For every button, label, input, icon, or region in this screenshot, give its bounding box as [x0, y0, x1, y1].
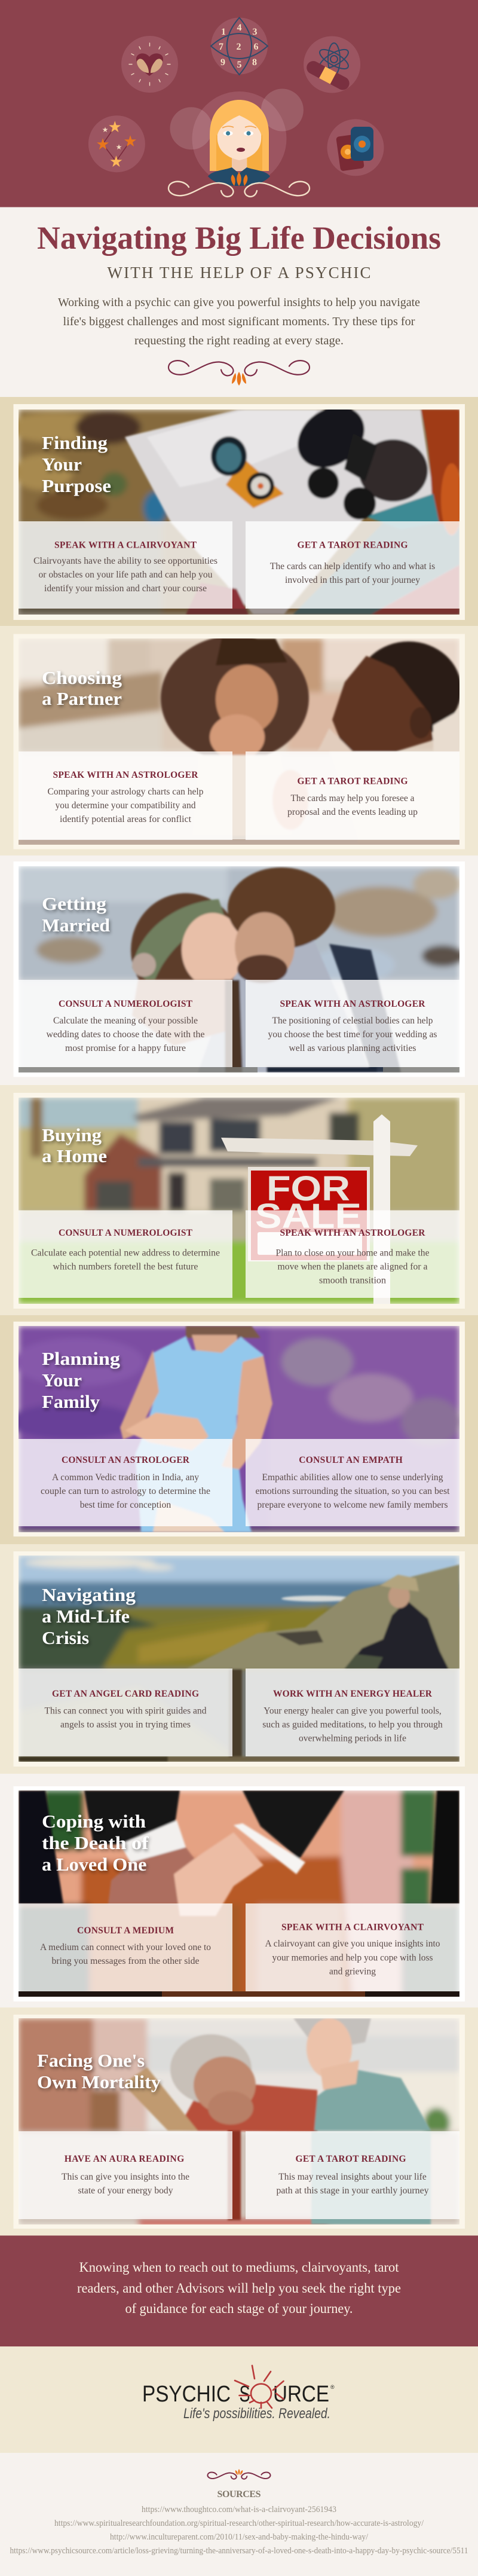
heading — [37, 2050, 161, 2092]
card: astrologer: SPEAK WITH AN ASTROLOGER — [280, 999, 425, 1009]
closing banner: of guidance for each stage of your journey. — [125, 2301, 353, 2316]
panel: Facing One's Own Mortality — [0, 2007, 478, 2236]
card: tarot — [246, 521, 459, 609]
icon: numerology grid: 9 — [220, 57, 225, 68]
heading: Your — [42, 1370, 82, 1391]
sources — [10, 2469, 468, 2556]
intro text: requesting the right reading at every stage. — [134, 334, 344, 347]
subtitle: WITH THE HELP OF A PSYCHIC — [108, 264, 370, 282]
intro text — [58, 296, 420, 347]
heading: Finding — [42, 432, 108, 453]
heading — [42, 1584, 136, 1648]
photo: holding hands at a funeral — [19, 1790, 459, 1997]
card: numerologist: CONSULT A NUMEROLOGIST — [59, 1228, 193, 1238]
photo: house with for-sale sign — [19, 1098, 459, 1304]
heading: Family — [42, 1391, 100, 1412]
heading: Planning — [42, 1348, 121, 1369]
card: astrologer: best time for conception — [80, 1500, 171, 1510]
heading: Married — [42, 915, 110, 936]
card: numerologist: which numbers foretell the best future — [53, 1261, 198, 1272]
logo: Psychic Source: S — [239, 2382, 250, 2407]
card: numerologist: Calculate each potential new address to determine — [31, 1248, 220, 1258]
icon: constellation: ★ — [123, 133, 137, 151]
card: tarot: GET A TAROT READING — [298, 777, 407, 787]
card: numerologist: Calculate the meaning of your possible — [53, 1016, 198, 1026]
card: tarot: path at this stage in your earthly journey — [276, 2186, 429, 2196]
heading — [42, 893, 110, 936]
photo: map, compass and binoculars — [19, 410, 459, 615]
card: clairvoyant: Clairvoyants have the ability to see opportunities — [33, 556, 217, 566]
card: angel cards: GET AN ANGEL CARD READING — [52, 1689, 199, 1699]
card: numerologist — [19, 980, 232, 1067]
card: astrologer: you determine your compatibility and — [55, 800, 196, 811]
icon: numerology grid: 8 — [252, 57, 257, 68]
card: angel cards — [19, 1669, 232, 1756]
sources list — [10, 2505, 468, 2556]
photo: senior couple in kitchen — [19, 2018, 459, 2225]
card: tarot: The cards may help you foresee a — [290, 793, 415, 803]
card: aura: HAVE AN AURA READING — [65, 2154, 184, 2164]
closing banner: Knowing when to reach out to mediums, clairvoyants, tarot — [79, 2260, 399, 2275]
card: clairvoyant: A clairvoyant can give you unique insights into — [265, 1939, 440, 1949]
card: astrologer: CONSULT AN ASTROLOGER — [62, 1455, 190, 1465]
card: astrologer: SPEAK WITH AN ASTROLOGER — [280, 1228, 425, 1238]
card: angel cards: This can connect you with spirit guides and — [44, 1706, 207, 1716]
icon: constellation: ★ — [116, 143, 122, 151]
card: astrologer: move when the planets are aligned for a — [277, 1261, 428, 1272]
card: numerologist: CONSULT A NUMEROLOGIST — [59, 999, 193, 1009]
sources list: http://www.incultureparent.com/2010/11/sex-and-baby-making-the-hindu-way/ — [110, 2532, 369, 2542]
ornament: cream flourish — [168, 182, 310, 197]
card: astrologer: smooth transition — [319, 1276, 386, 1286]
card: clairvoyant: your memories and help you cope with loss — [272, 1952, 433, 1963]
icon: numerology grid: 3 — [252, 27, 257, 37]
card: empath: CONSULT AN EMPATH — [299, 1455, 403, 1465]
card: astrologer: A common Vedic tradition in India, any — [52, 1472, 199, 1483]
icon: atom and bandage — [304, 36, 360, 93]
icon: healing hands heart — [121, 36, 178, 93]
card: aura: state of your energy body — [78, 2186, 173, 2196]
card: aura — [19, 2131, 232, 2219]
card: astrologer: The positioning of celestial bodies can help — [272, 1016, 433, 1026]
sources list: https://www.thoughtco.com/what-is-a-clairvoyant-2561943 — [142, 2505, 336, 2514]
card: energy healer: such as guided meditations, to help you through — [262, 1720, 443, 1730]
card: clairvoyant: SPEAK WITH A CLAIRVOYANT — [54, 540, 197, 550]
card: astrologer: couple can turn to astrology to determine the — [41, 1486, 210, 1496]
logo: Psychic Source: PSYCHIC — [142, 2382, 231, 2407]
heading: Navigating — [42, 1584, 136, 1605]
card: astrologer: well as various planning activities — [289, 1043, 416, 1053]
ornament: maroon flourish with petals — [168, 360, 310, 386]
ornament: sources flourish — [208, 2469, 270, 2479]
panel: Choosing a Partner — [0, 626, 478, 855]
heading: Getting — [42, 893, 107, 914]
heading: Facing One's — [37, 2050, 145, 2071]
card: aura: This can give you insights into the — [62, 2172, 189, 2182]
logo: Psychic Source: ® — [330, 2384, 335, 2390]
card: energy healer: overwhelming periods in life — [299, 1734, 406, 1743]
sources heading: SOURCES — [217, 2489, 261, 2499]
card: astrologer: Plan to close on your home and make the — [276, 1248, 429, 1258]
icon: tarot cards — [327, 119, 384, 176]
card: tarot: proposal and the events leading up — [287, 807, 418, 817]
icon: constellation: ★ — [96, 136, 110, 154]
card: numerologist: wedding dates to choose the date with the — [47, 1029, 204, 1040]
heading: Buying — [42, 1124, 102, 1145]
photo: couple proposal — [19, 635, 461, 845]
closing banner — [0, 2236, 478, 2346]
heading: a Loved One — [42, 1854, 147, 1875]
heading: a Mid-Life — [42, 1606, 130, 1627]
icon: numerology grid: 6 — [253, 42, 258, 52]
heading: Crisis — [42, 1627, 89, 1648]
icon: numerology grid: 7 — [219, 42, 223, 52]
card: astrologer — [246, 980, 459, 1067]
logo: Psychic Source: Life's possibilities. Revealed. — [183, 2406, 330, 2422]
card: empath: prepare everyone to welcome new family members — [257, 1500, 448, 1510]
card: clairvoyant: SPEAK WITH A CLAIRVOYANT — [281, 1923, 424, 1932]
icon: constellation: ★ — [108, 118, 122, 136]
heading — [42, 1348, 121, 1412]
heading — [42, 1811, 149, 1875]
sources list: https://www.spiritualresearchfoundation.org/spiritual-research/other-spiritual-research/how-accurate-is-astrology/ — [54, 2519, 424, 2528]
panel: Navigating a Mid-Life Crisis — [0, 1544, 478, 1774]
card: clairvoyant: identify your mission and chart your course — [44, 583, 207, 594]
illustration: psychic woman — [170, 88, 304, 186]
card: empath: Empathic abilities allow one to sense underlying — [262, 1472, 443, 1483]
card: tarot: involved in this part of your journey — [285, 575, 420, 585]
card: energy healer — [246, 1669, 459, 1756]
card: astrologer: identify potential areas for conflict — [60, 814, 192, 824]
panel: Getting Married — [13, 861, 465, 1077]
card: empath: emotions surrounding the situation, so you can best — [256, 1486, 450, 1496]
card: medium: bring you messages from the other side — [51, 1956, 200, 1966]
card: tarot — [246, 751, 459, 840]
panel: Finding Your Purpose — [0, 394, 478, 626]
heading: a Partner — [42, 688, 122, 709]
photo: pregnant woman in lavender — [7, 1326, 461, 1532]
photo: wedding couple — [19, 866, 464, 1072]
card: tarot: GET A TAROT READING — [298, 540, 407, 550]
card: astrologer: you choose the best time for your wedding as — [268, 1029, 437, 1040]
card: angel cards: angels to assist you in trying times — [60, 1720, 191, 1730]
icon: constellation: ★ — [109, 153, 123, 171]
card: tarot: The cards can help identify who and what is — [270, 561, 435, 572]
icon: numerology grid — [211, 18, 268, 75]
intro text: life's biggest challenges and most significant moments. Try these tips for — [63, 315, 415, 328]
card: numerologist — [19, 1210, 232, 1298]
heading: Own Mortality — [37, 2071, 161, 2092]
intro text: Working with a psychic can give you powerful insights to help you navigate — [58, 296, 420, 309]
heading: Choosing — [42, 667, 122, 688]
title: Navigating Big Life Decisions — [37, 220, 441, 256]
card: empath — [246, 1439, 459, 1526]
panel: Buying a Home — [0, 1085, 478, 1315]
card: clairvoyant: or obstacles on your life path and can help you — [38, 570, 213, 580]
heading: a Home — [42, 1145, 107, 1166]
card: clairvoyant: and grieving — [329, 1967, 376, 1977]
card: clairvoyant — [246, 1903, 459, 1991]
card: tarot — [246, 2131, 459, 2219]
logo: Psychic Source: URCE — [273, 2382, 329, 2407]
card: energy healer: WORK WITH AN ENERGY HEALER — [273, 1689, 433, 1699]
card: tarot: GET A TAROT READING — [295, 2154, 406, 2164]
panel: Planning Your Family — [0, 1315, 478, 1544]
card: energy healer: Your energy healer can give you powerful tools, — [263, 1706, 442, 1716]
icon: numerology grid: 2 — [237, 42, 241, 52]
icon: constellation: ★ — [102, 126, 108, 134]
icon: numerology grid: 5 — [237, 60, 241, 70]
photo: man overlooking mountain — [19, 1556, 459, 1762]
card: astrologer: Comparing your astrology charts can help — [48, 787, 203, 797]
closing banner: readers, and other Advisors will help you seek the right type — [77, 2281, 401, 2296]
card: astrologer — [19, 1439, 232, 1526]
icon: numerology grid: 1 — [221, 27, 226, 37]
photo: house with for-sale sign: FOR — [266, 1169, 350, 1208]
logo: Psychic Source — [0, 2346, 478, 2453]
icon: constellation — [88, 115, 145, 172]
card: astrologer: SPEAK WITH AN ASTROLOGER — [53, 770, 198, 780]
heading — [42, 432, 111, 496]
card: numerologist: most promise for a happy future — [65, 1043, 186, 1053]
heading: Coping with — [42, 1811, 146, 1832]
heading — [42, 1124, 107, 1166]
card: clairvoyant — [19, 521, 232, 609]
card: astrologer — [19, 751, 232, 840]
card: medium: CONSULT A MEDIUM — [77, 1926, 174, 1936]
panel: Coping with the Death of a Loved One — [0, 1774, 478, 2007]
heading — [42, 667, 122, 709]
card: astrologer — [246, 1210, 459, 1298]
heading: the Death of — [42, 1832, 149, 1853]
header banner — [0, 0, 478, 207]
photo: house with for-sale sign: SALE — [255, 1197, 361, 1236]
card: medium: A medium can connect with your loved one to — [40, 1942, 211, 1952]
card: medium — [19, 1903, 232, 1991]
heading: Your — [42, 454, 82, 475]
icon: numerology grid: 4 — [237, 23, 241, 33]
heading: Purpose — [42, 475, 111, 496]
card: tarot: This may reveal insights about your life — [278, 2172, 427, 2182]
